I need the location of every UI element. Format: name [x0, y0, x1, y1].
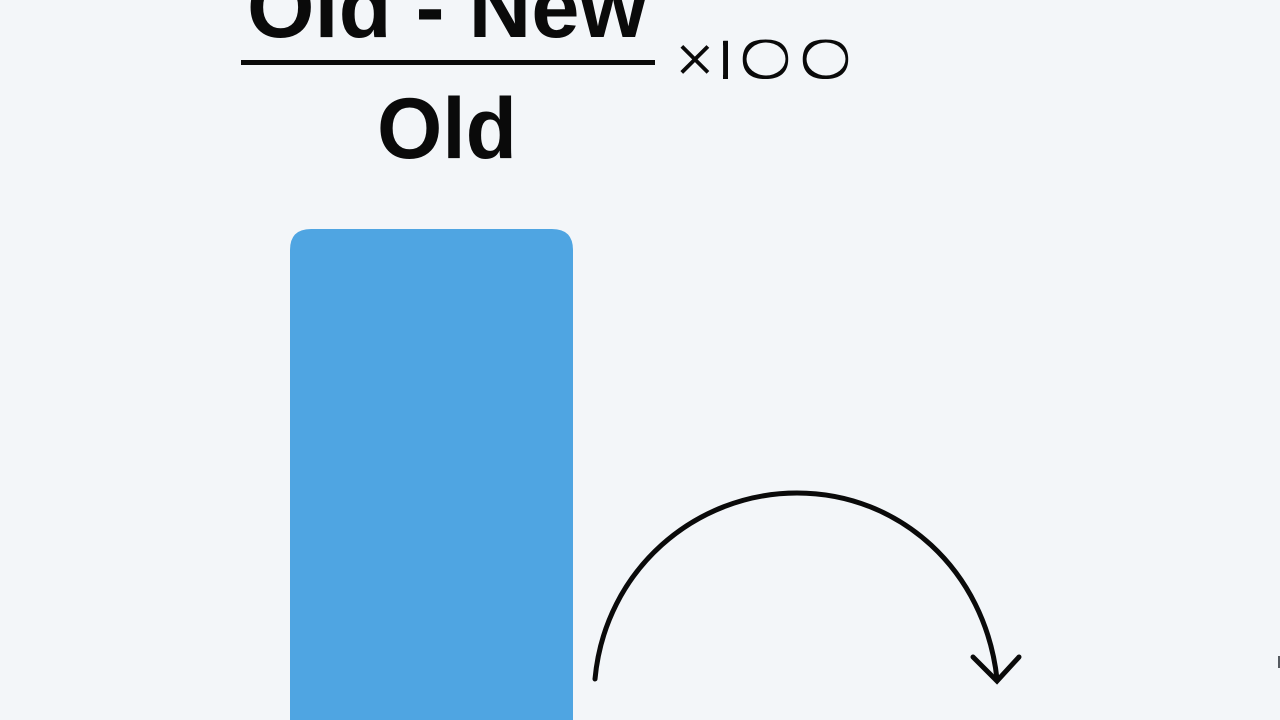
cropped mark at right edge [1278, 656, 1280, 668]
fraction bar [241, 60, 655, 65]
blue bar [290, 229, 573, 720]
multiplier [680, 40, 848, 79]
multiplier: 0 [739, 28, 792, 91]
multiplier: 1 [709, 28, 740, 91]
multiplier: 0 [799, 28, 852, 91]
multiplier: × [675, 21, 715, 97]
formula [241, 0, 848, 159]
arrow: curved decrease [595, 493, 1019, 681]
denominator: Old [377, 81, 517, 177]
